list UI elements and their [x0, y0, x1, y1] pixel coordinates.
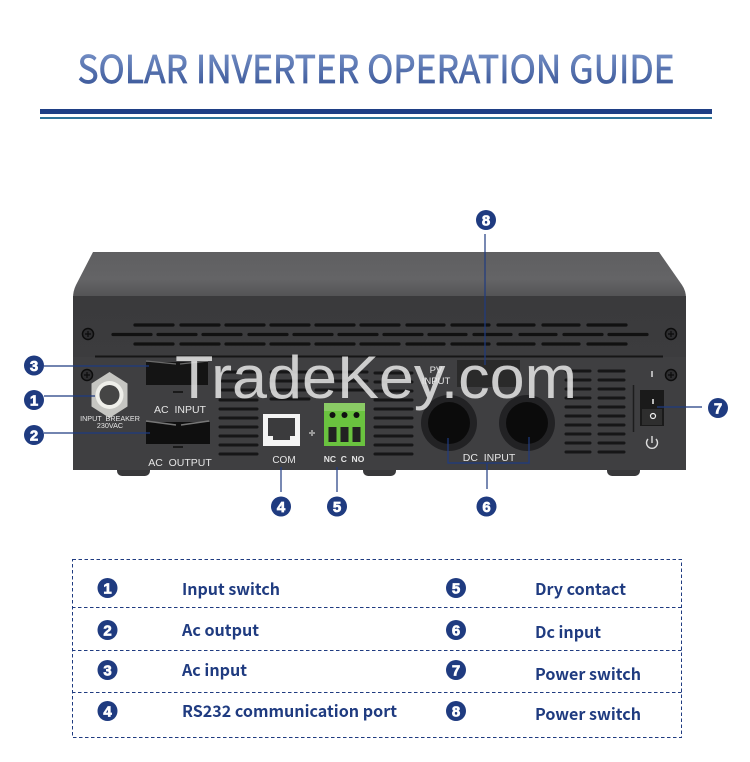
marker 2: [24, 425, 44, 445]
callout lines: [44, 234, 702, 492]
COM port: [263, 414, 300, 446]
AC labels: AC INPUT: [154, 404, 207, 416]
row 3 left: 3: [103, 662, 112, 680]
row 2 left: Ac output: [181, 617, 259, 641]
callout markers: [24, 210, 728, 516]
marker 4: 4: [277, 499, 286, 516]
marker 6: 6: [482, 499, 491, 516]
breaker label: INPUT BREAKER: [80, 414, 140, 423]
title: SOLAR INVERTER OPERATION GUIDE: [78, 39, 674, 94]
marker 2: 2: [30, 428, 38, 444]
PV label: PV: [430, 365, 443, 376]
row 1 right: [446, 576, 626, 600]
casing top: [73, 252, 686, 320]
screws: [82, 328, 676, 380]
marker 4: [271, 496, 291, 516]
NC C NO label: NC C NO: [324, 454, 365, 464]
PV input socket: [457, 360, 520, 387]
marker 5: 5: [333, 499, 341, 516]
marker 1: 1: [30, 392, 38, 410]
row 4 right: [446, 701, 641, 725]
title underline: [40, 109, 712, 119]
row 1 left: Input switch: [182, 576, 280, 600]
COM label: COM: [272, 455, 296, 466]
marker 8: 8: [482, 212, 490, 230]
marker 5: [327, 496, 347, 516]
row 3 left: Ac input: [181, 657, 247, 681]
table frame: [72, 560, 682, 738]
row 1 left: 1: [103, 580, 112, 598]
marker 1: [24, 390, 44, 410]
marker 3: 3: [30, 358, 38, 375]
row 2 right: [446, 619, 601, 643]
row 2 left: [98, 617, 259, 641]
row 4 right: Power switch: [535, 701, 641, 725]
power switch: [634, 371, 664, 448]
inverter device: INPUT: [422, 376, 450, 387]
row 3 right: Power switch: [535, 661, 641, 685]
inverter device: 230VAC: [97, 421, 123, 430]
row 1 right: 5: [452, 580, 460, 598]
row 4 left: RS232 communication port: [182, 698, 397, 722]
row 1 left: [98, 576, 280, 600]
watermark: TradeKey.com: [175, 344, 577, 411]
input breaker: [92, 372, 128, 418]
AC input socket: [146, 361, 208, 392]
marker 7: [708, 398, 728, 418]
casing front: [73, 296, 686, 470]
row 2 left: 2: [103, 622, 112, 640]
marker 6: [476, 496, 496, 516]
row 2 right: Dc input: [535, 619, 601, 643]
inverter device: AC OUTPUT: [148, 457, 212, 469]
AC output socket: [146, 421, 210, 447]
row 4 right: 8: [452, 704, 460, 720]
dry contact terminal: [324, 403, 365, 446]
row 3 right: [446, 660, 641, 685]
legend table: [72, 560, 682, 738]
lower front panel: [73, 357, 686, 470]
row 3 right: 7: [452, 662, 460, 680]
inverter device: [73, 252, 686, 476]
DC input sockets: [421, 395, 555, 451]
upper vents: [113, 325, 647, 344]
row 4 left: 4: [103, 704, 112, 720]
row 2 right: 6: [452, 622, 460, 640]
marker 8: [476, 210, 496, 230]
feet: [117, 464, 640, 476]
marker 7: 7: [714, 400, 722, 418]
row 3 left: [98, 657, 247, 681]
DC label: DC INPUT: [463, 452, 516, 464]
marker 3: [24, 356, 44, 376]
lower vents: [220, 371, 624, 454]
row 1 right: Dry contact: [535, 576, 626, 600]
